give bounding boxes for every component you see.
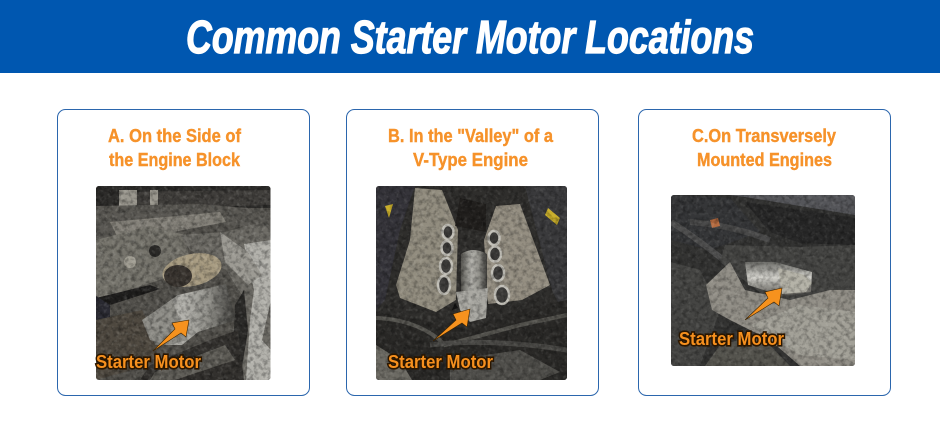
heading: panel A: the Engine Block [109, 149, 241, 170]
photo: V engine valley [376, 186, 567, 380]
photo: transverse engine [671, 195, 855, 366]
label: starter motor: Starter Motor [679, 328, 784, 349]
heading: panel B: V-Type Engine [413, 149, 528, 170]
panel: side of engine block [58, 110, 310, 396]
arrow: pointing at starter [153, 320, 189, 351]
arrow: pointing at starter [433, 309, 470, 341]
photo: engine with side starter [96, 186, 271, 380]
heading: panel C: C.On Transversely [692, 125, 837, 146]
heading: panel B [388, 125, 554, 170]
heading: panel A [108, 125, 242, 170]
header banner [0, 0, 940, 73]
arrow: pointing at starter [745, 288, 782, 320]
heading: panel A: A. On the Side of [108, 125, 242, 146]
heading: panel B: B. In the "Valley" of a [388, 125, 554, 146]
heading: panel C [692, 125, 837, 170]
heading: panel C: Mounted Engines [697, 149, 832, 170]
panel: transversely mounted engines [638, 110, 890, 396]
panel: valley of V-type engine [346, 110, 598, 396]
title: Common Starter Motor Locations [186, 11, 754, 63]
label: starter motor: Starter Motor [388, 351, 493, 372]
label: starter motor: Starter Motor [96, 351, 201, 372]
